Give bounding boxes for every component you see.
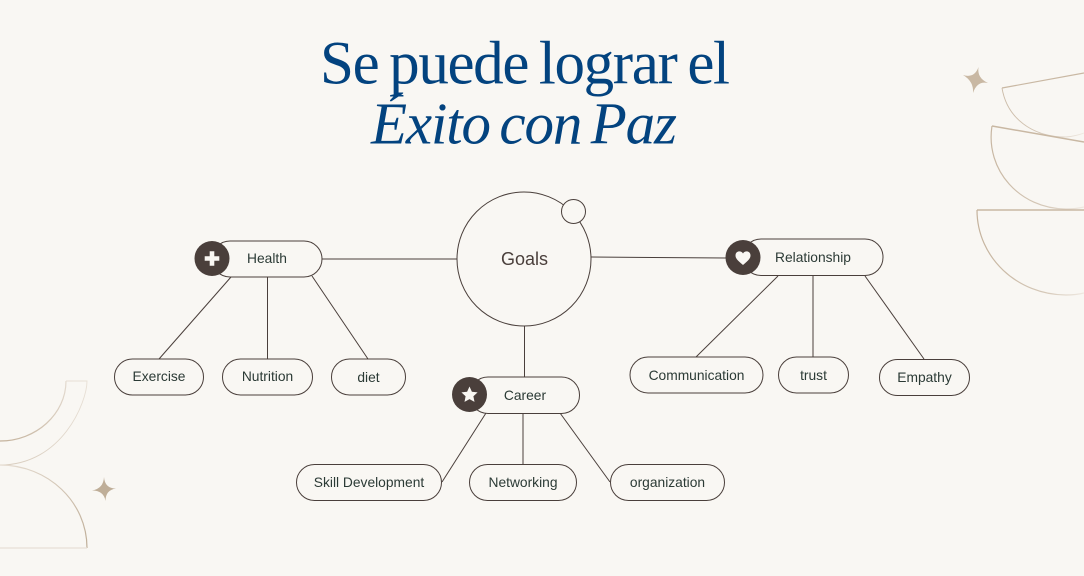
node: Nutrition: Nutrition — [242, 369, 293, 384]
node: organization: organization — [630, 475, 705, 490]
node: Networking: Networking — [488, 475, 558, 490]
title: Éxito con Paz — [370, 90, 677, 156]
node: Exercise: Exercise — [133, 369, 186, 384]
node: diet — [332, 359, 406, 395]
node: organization — [610, 464, 724, 500]
node: trust — [778, 357, 848, 393]
node: Career — [452, 377, 580, 414]
central node: Goals — [457, 192, 591, 326]
central node: Goals: Goals — [501, 249, 548, 269]
decoration: bottom-left arcs — [0, 381, 87, 548]
title: Se puede lograr el — [320, 30, 730, 98]
node: Communication — [630, 357, 763, 393]
node: Health — [194, 241, 322, 277]
decoration: bottom-left sparkle — [92, 477, 116, 501]
node: Skill Development: Skill Development — [314, 475, 424, 490]
node: Exercise — [114, 359, 204, 395]
decoration: top-right bowls — [977, 73, 1084, 295]
node: Health: Health — [247, 251, 287, 266]
node: Skill Development — [296, 464, 442, 500]
node: Empathy: Empathy — [897, 370, 952, 385]
connectors — [159, 257, 924, 482]
decoration: top-right sparkle — [963, 67, 988, 93]
title — [320, 30, 730, 156]
node: Relationship: Relationship — [775, 250, 851, 265]
node: Relationship — [726, 239, 883, 276]
node: Empathy — [880, 360, 970, 396]
node: Communication: Communication — [649, 368, 744, 383]
node: Career: Career — [504, 388, 546, 403]
node: trust: trust — [800, 368, 827, 383]
node: Nutrition — [222, 359, 312, 395]
node: Networking — [470, 464, 576, 500]
node: diet: diet — [357, 370, 380, 385]
